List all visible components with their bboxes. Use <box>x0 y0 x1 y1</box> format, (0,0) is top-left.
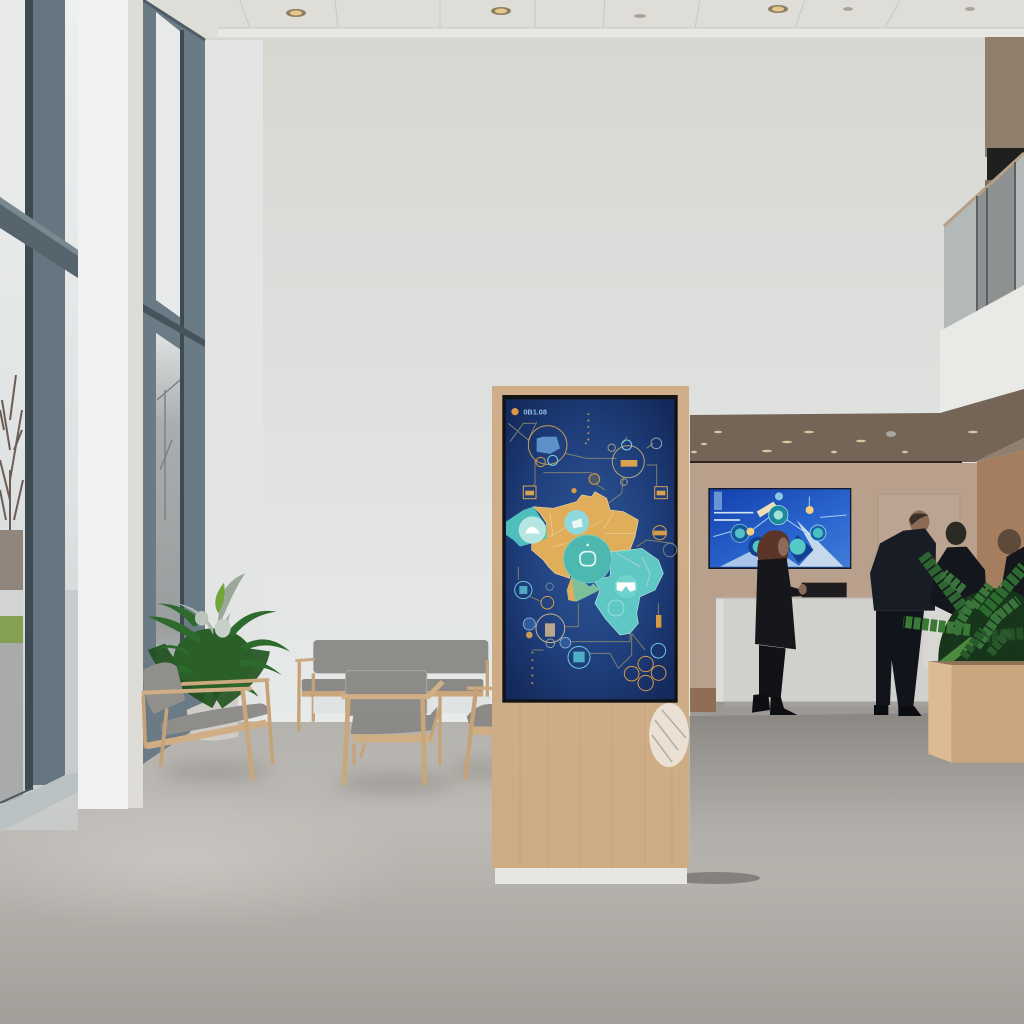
column <box>78 0 143 809</box>
wood wall panel <box>977 450 1024 610</box>
screen bezel <box>502 395 678 703</box>
person: man in dark suit <box>870 510 936 716</box>
sofa <box>297 640 490 732</box>
floor light patch <box>0 790 420 930</box>
left window <box>0 0 78 832</box>
screen display <box>506 399 674 699</box>
baseboard <box>263 714 493 722</box>
floor reflection of reception <box>690 688 1024 880</box>
desk monitor <box>802 583 847 597</box>
furniture shadows <box>160 762 510 792</box>
screen title <box>511 408 547 417</box>
map: lower region <box>567 577 600 602</box>
balcony glass railing <box>944 153 1024 331</box>
outdoor road and grass <box>0 590 23 616</box>
map node: north <box>564 510 589 535</box>
person: third visitor <box>998 529 1024 597</box>
map node: right <box>608 575 638 616</box>
map: central teal region <box>564 535 612 583</box>
lower left icons <box>515 581 571 648</box>
armchair center <box>342 671 443 783</box>
kiosk base <box>495 867 687 884</box>
map node: left <box>519 516 546 544</box>
planter plant <box>903 555 1024 665</box>
door outline <box>878 494 960 594</box>
lower center icon <box>568 646 590 668</box>
kiosk shadow <box>670 872 760 884</box>
map: left teal region <box>506 507 547 547</box>
reception ceiling <box>690 389 1024 463</box>
outdoor tree <box>0 375 23 590</box>
person: woman at desk <box>752 530 807 715</box>
mezzanine parapet <box>940 285 1024 413</box>
top left icon cluster <box>528 426 567 467</box>
potted plant <box>148 573 290 740</box>
floor <box>0 712 1024 1024</box>
connector lines <box>508 413 673 685</box>
map: borders <box>550 513 650 587</box>
reception wall <box>690 463 980 688</box>
screen title: 0B1.08 <box>523 408 547 417</box>
map: yellow region <box>532 492 638 578</box>
kiosk smudge <box>649 703 689 767</box>
upper level wall <box>985 37 1024 260</box>
back wall <box>143 30 990 730</box>
top right icon cluster <box>608 438 662 485</box>
ceiling <box>0 0 1024 38</box>
right edge icon <box>653 526 677 557</box>
second window <box>143 0 205 764</box>
planter box <box>928 661 1024 763</box>
armchair right <box>465 688 492 778</box>
reception desk <box>716 597 1024 707</box>
wall television <box>708 488 851 569</box>
map: right teal region <box>593 548 663 635</box>
wooden kiosk body <box>492 386 689 868</box>
map node: center <box>580 544 595 566</box>
lower right icon group <box>624 615 666 691</box>
person: second man <box>930 522 986 617</box>
wall pier <box>205 40 263 720</box>
armchair left <box>143 662 273 779</box>
small amber icons <box>523 474 667 499</box>
